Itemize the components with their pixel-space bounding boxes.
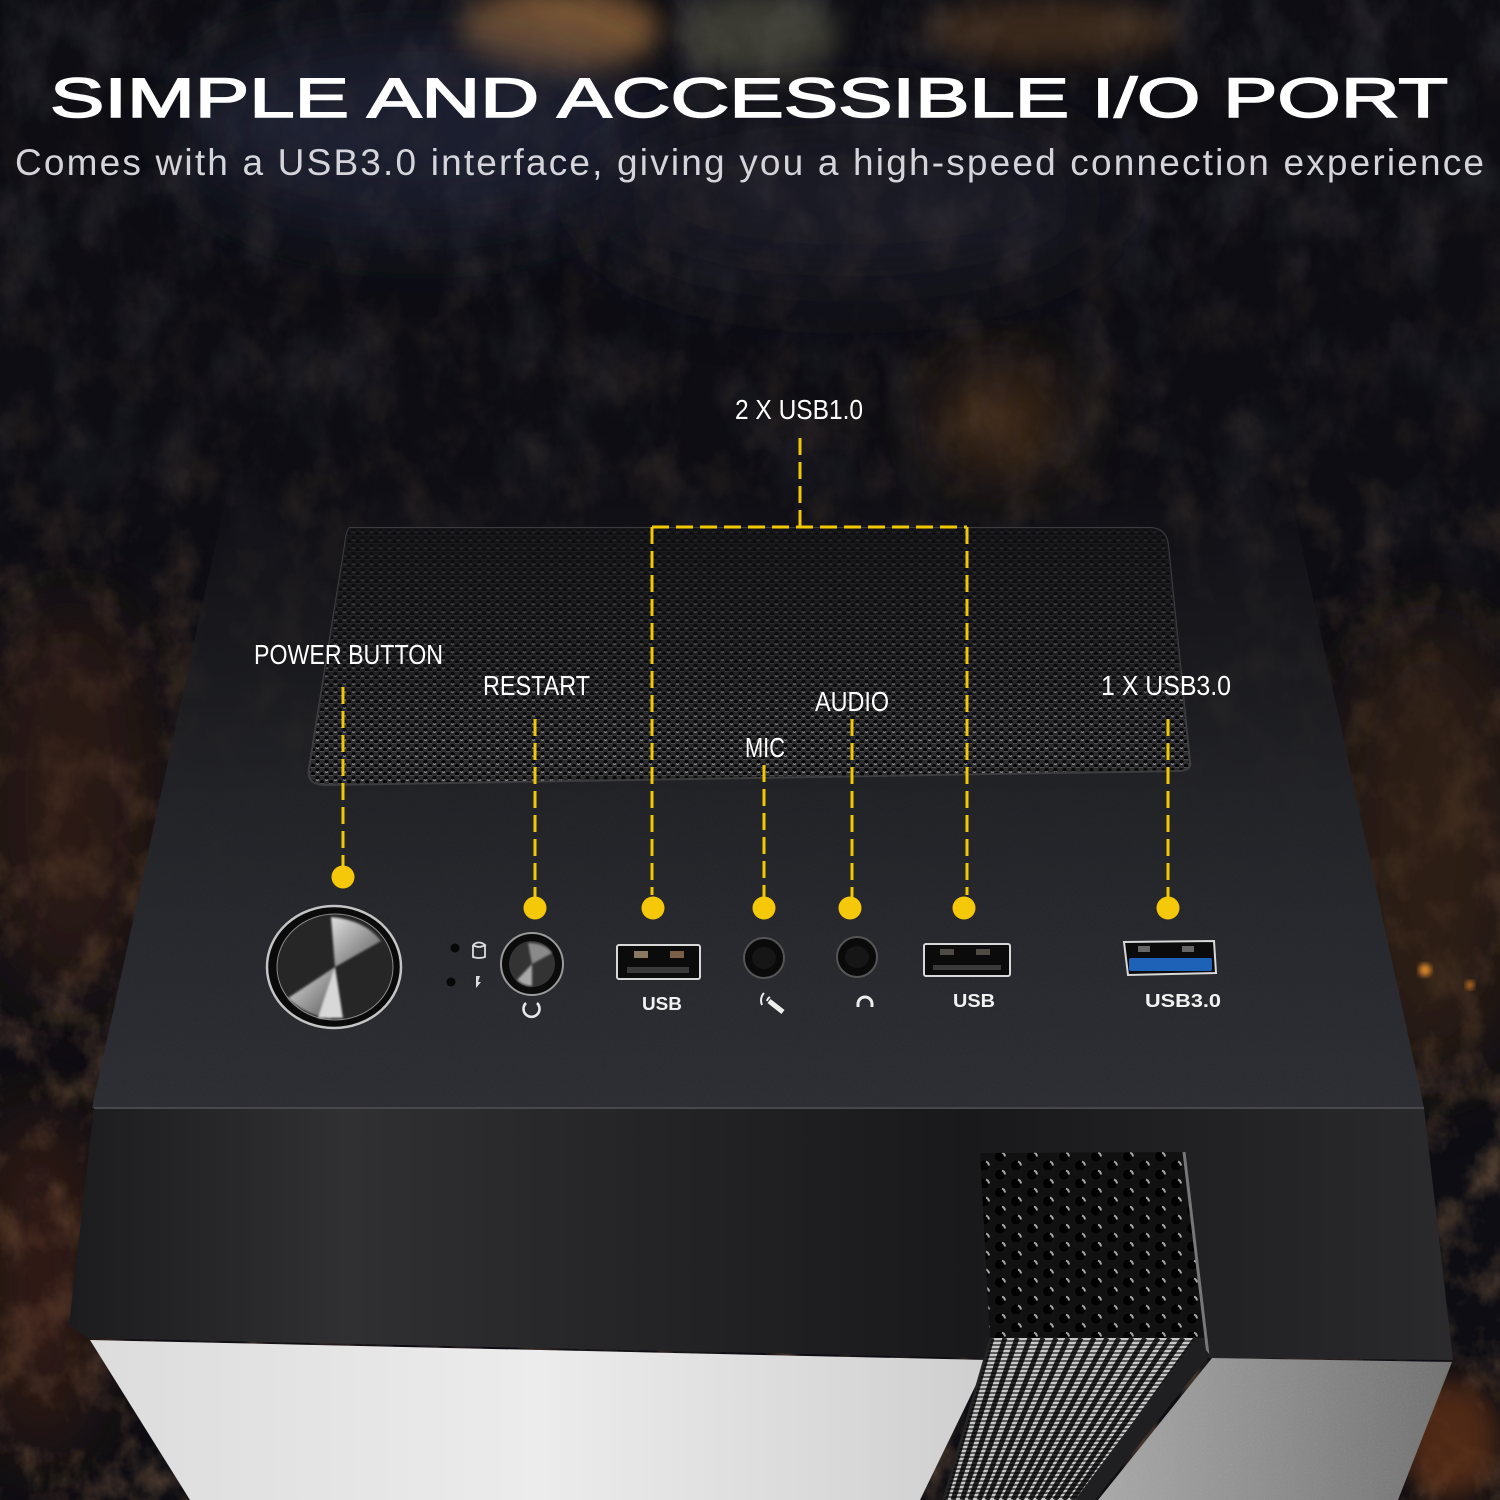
- callout: USB 3.0: [1101, 670, 1231, 920]
- USB port: USB: [642, 994, 682, 1014]
- title: SIMPLE AND ACCESSIBLE I/O PORT: [50, 66, 1448, 129]
- callout: 2 x USB1.0: 2 X USB1.0: [735, 394, 863, 425]
- callout: power button: POWER BUTTON: [254, 639, 443, 670]
- grey right panel: [1098, 1358, 1452, 1500]
- USB port: USB: [953, 991, 995, 1011]
- callout: audio: AUDIO: [815, 686, 889, 717]
- white side panel: [90, 1340, 988, 1500]
- subtitle: Comes with a USB3.0 interface, giving you a high-speed connection experience: [15, 142, 1484, 183]
- dark chamfer: [1075, 1338, 1210, 1500]
- striped grille edge: [945, 1338, 1196, 1500]
- callout: power button: [254, 639, 443, 888]
- mic jack: [744, 938, 784, 1012]
- callout: USB 3.0: 1 X USB3.0: [1101, 670, 1231, 701]
- USB 3.0 port: [1124, 941, 1221, 1011]
- callout: mic: MIC: [745, 732, 785, 763]
- case top panel: [92, 470, 1424, 1108]
- power button: [267, 906, 401, 1028]
- LED indicators: [446, 942, 485, 988]
- callout: mic: [745, 732, 785, 920]
- mesh vent: [300, 520, 1200, 790]
- USB port: [924, 944, 1010, 1011]
- perforated grille: [980, 1152, 1205, 1338]
- callout: restart: RESTART: [483, 670, 590, 701]
- callout: restart: [483, 670, 590, 920]
- USB port: [617, 945, 700, 1014]
- restart button: [501, 933, 563, 1017]
- USB 3.0 port: USB3.0: [1145, 991, 1221, 1011]
- callout: 2 x USB1.0: [642, 394, 976, 920]
- audio jack: [837, 937, 877, 1007]
- case front panel: [69, 1108, 1453, 1360]
- callout: audio: [815, 686, 889, 920]
